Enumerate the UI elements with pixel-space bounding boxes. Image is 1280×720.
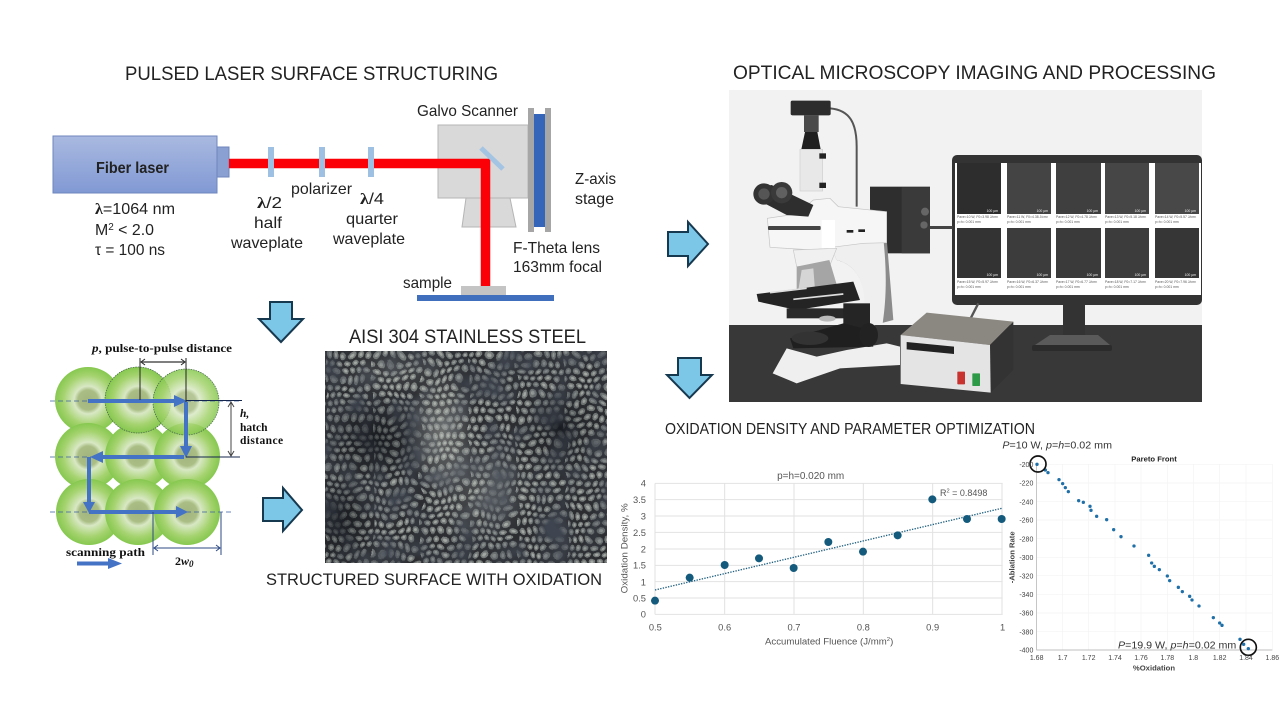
- arrow: scanning direction: [77, 558, 122, 569]
- label: 2w0: 2w: [175, 554, 189, 568]
- micrograph grid: [957, 163, 1199, 278]
- y axis ticks: 1: [641, 577, 646, 587]
- x axis ticks: 1.78: [1161, 655, 1174, 662]
- chart title: Pareto Front: [1131, 454, 1177, 463]
- y axis ticks: -200: [1019, 462, 1033, 469]
- label: sample: sample: [403, 275, 452, 292]
- x axis ticks: 1.8: [1188, 655, 1198, 662]
- x axis title: Accumulated Fluence (J/mm: [765, 636, 879, 646]
- dimension: hatch distance: [186, 400, 242, 457]
- caption: structured surface with oxidation: STRUCTURED SURFACE WITH OXIDATION: [266, 570, 602, 589]
- icon: microscope: [753, 101, 953, 383]
- micrograph captions: p=h= 0.001 mm: [1155, 285, 1179, 289]
- icon: polarizer: [319, 147, 325, 177]
- x axis ticks: 0.7: [788, 623, 800, 633]
- micrograph captions: Pave=15 W, F0=5.97 J/cm²: [957, 280, 999, 284]
- panel: microscope and monitor illustration: [729, 90, 1202, 402]
- dimension: 2w0: [153, 512, 221, 555]
- micrograph scale labels: 100 µm: [1037, 273, 1048, 277]
- label: z-axis stage: [575, 171, 616, 208]
- y axis ticks: 1.5: [633, 561, 646, 571]
- panel: scanning pattern diagram: [50, 343, 283, 569]
- micrograph captions: p=h= 0.001 mm: [1105, 220, 1129, 224]
- y axis ticks: 0.5: [633, 594, 646, 604]
- label: f-theta lens: [513, 240, 602, 276]
- y axis ticks: 3.5: [633, 495, 646, 505]
- x axis ticks: 1.74: [1108, 655, 1122, 662]
- micrograph captions: Pave=17 W, F0=6.77 J/cm²: [1056, 280, 1098, 284]
- micrograph captions: p=h= 0.001 mm: [1155, 220, 1179, 224]
- micrograph scale labels: 100 µm: [1185, 209, 1196, 213]
- micrograph captions: p=h= 0.001 mm: [1056, 220, 1080, 224]
- y axis ticks: -260: [1019, 518, 1033, 525]
- micrograph captions: Pave=11 W, F0=4.38 J/cm²: [1007, 215, 1049, 219]
- x axis ticks: 1.68: [1030, 655, 1044, 662]
- x axis ticks: [649, 623, 1005, 633]
- y axis ticks: 0: [641, 610, 646, 620]
- y axis ticks: -320: [1019, 573, 1033, 580]
- micrograph scale labels: 100 µm: [1185, 273, 1196, 277]
- chart: pareto front: [1002, 441, 1279, 672]
- y axis ticks: -240: [1019, 499, 1033, 506]
- annotation: top point: P=10 W, p=h=0.02 mm: [1002, 441, 1112, 452]
- y axis ticks: 2: [641, 544, 646, 554]
- micrograph captions: Pave=12 W, F0=4.78 J/cm²: [1056, 215, 1098, 219]
- background wall: [729, 90, 1202, 325]
- laser parameters: 2: [108, 222, 114, 233]
- micrograph captions: Pave=16 W, F0=6.37 J/cm²: [1007, 280, 1049, 284]
- micrograph captions: p=h= 0.001 mm: [1105, 285, 1129, 289]
- label: half waveplate: waveplate: [230, 235, 303, 252]
- y axis ticks: 2.5: [633, 528, 646, 538]
- label: quarter waveplate: quarter: [346, 211, 399, 228]
- highlight circle: top: [1030, 456, 1046, 472]
- y axis title: Oxidation Density, %: [619, 503, 629, 593]
- x axis ticks: 1.72: [1082, 655, 1096, 662]
- label: quarter waveplate: λ/4: [360, 191, 384, 208]
- label: scanning path: scanning path: [66, 547, 146, 559]
- y axis title: -Ablation Rate: [1008, 531, 1017, 583]
- label: hatch distance: [240, 408, 283, 447]
- micrograph captions: p=h= 0.001 mm: [957, 285, 981, 289]
- micrograph captions: p=h= 0.001 mm: [1007, 285, 1031, 289]
- arrow: down to optimization: [667, 358, 712, 398]
- label: hatch distance: hatch: [240, 422, 268, 434]
- y axis ticks: -380: [1019, 629, 1033, 636]
- highlight circle: bottom: [1240, 639, 1256, 655]
- heading: oxidation density and parameter optimization: OXIDATION DENSITY AND PARAMETER OPTIMIZATION: [665, 421, 1035, 438]
- row centre lines: [50, 401, 240, 512]
- icon: galvo mirror: [481, 148, 503, 169]
- annotation: bottom point: P=19.9 W, p=h=0.02 mm: [1118, 640, 1236, 651]
- heading: AISI 304 stainless steel: AISI 304 STAINLESS STEEL: [349, 327, 586, 348]
- x axis ticks: 0.6: [718, 623, 731, 633]
- x axis ticks: [1030, 655, 1279, 662]
- micrograph captions: p=h= 0.001 mm: [1056, 285, 1080, 289]
- icon: quarter waveplate: [368, 147, 374, 177]
- data points: [651, 495, 1006, 605]
- bench: [729, 325, 1202, 402]
- laser beam path: [229, 164, 486, 286]
- micrograph scale labels: 100 µm: [1037, 209, 1048, 213]
- trendline: [655, 508, 1002, 590]
- label: half waveplate: λ/2: [257, 195, 282, 212]
- micrograph captions: Pave=13 W, F0=5.18 J/cm²: [1105, 215, 1147, 219]
- y axis ticks: 4: [641, 479, 646, 489]
- x axis title: %Oxidation: [1133, 663, 1175, 672]
- label: hatch distance: h,: [240, 408, 249, 420]
- image: structured steel surface: [325, 351, 607, 563]
- x axis title: 2: [887, 637, 890, 643]
- micrograph captions: Pave=18 W, F0=7.17 J/cm²: [1105, 280, 1147, 284]
- micrograph scale labels: 100 µm: [1135, 209, 1146, 213]
- title: pulsed laser surface structuring: PULSED LASER SURFACE STRUCTURING: [125, 64, 498, 85]
- label: 2w0: 0: [189, 559, 194, 569]
- r-squared label: = 0.8498: [950, 488, 987, 498]
- label: f-theta lens: 163mm focal: [513, 259, 602, 276]
- x axis title: ): [890, 636, 893, 646]
- micrograph captions: Pave=10 W, F0=3.98 J/cm²: [957, 215, 999, 219]
- label: hatch distance: distance: [240, 435, 283, 447]
- title: optical microscopy imaging and processing: OPTICAL MICROSCOPY IMAGING AND PROCESSING: [733, 63, 1216, 84]
- label: z-axis stage: stage: [575, 191, 614, 208]
- y axis ticks: -300: [1019, 555, 1033, 562]
- label: half waveplate: [230, 195, 303, 252]
- arrow: right to microscopy: [668, 222, 708, 266]
- r-squared label: R: [940, 488, 946, 498]
- micrograph scale labels: 100 µm: [987, 273, 998, 277]
- x axis ticks: 1.7: [1058, 655, 1068, 662]
- x axis ticks: 0.8: [857, 623, 870, 633]
- label: pulse distance: p, pulse-to-pulse distance: [91, 343, 232, 355]
- y axis ticks: -340: [1019, 592, 1033, 599]
- micrograph captions: Pave=20 W, F0=7.96 J/cm²: [1155, 280, 1197, 284]
- icon: controller box: [901, 303, 1013, 393]
- icon: monitor: [952, 155, 1202, 305]
- icon: laser output nozzle: [217, 147, 229, 177]
- y axis ticks: -220: [1019, 481, 1033, 488]
- icon: sample and table: [417, 286, 554, 301]
- gridlines: [1037, 464, 1272, 650]
- x axis ticks: 0.9: [926, 623, 939, 633]
- icon: fiber laser body: [53, 136, 217, 193]
- x axis ticks: 1.82: [1213, 655, 1227, 662]
- panel: laser optical setup diagram: [53, 103, 616, 301]
- arrow heads: [83, 395, 192, 518]
- x axis ticks: 1.76: [1134, 655, 1148, 662]
- x axis ticks: 1.84: [1239, 655, 1253, 662]
- label: f-theta lens: F-Theta lens: [513, 240, 600, 257]
- y axis ticks: -280: [1019, 536, 1033, 543]
- gridlines: [655, 483, 1003, 614]
- pareto points: [1035, 463, 1250, 650]
- laser parameters: [95, 201, 175, 259]
- micrograph captions: p=h= 0.001 mm: [1007, 220, 1031, 224]
- label: z-axis stage: Z-axis: [575, 171, 616, 188]
- label: quarter waveplate: waveplate: [332, 231, 405, 248]
- micrograph scale labels: [987, 209, 1196, 277]
- laser parameters: τ = 100 ns: [95, 242, 165, 259]
- laser parameters: < 2.0: [114, 222, 154, 239]
- micrograph scale labels: 100 µm: [1135, 273, 1146, 277]
- micrograph captions: Pave=14 W, F0=5.57 J/cm²: [1155, 215, 1197, 219]
- icon: z-axis stage: [528, 108, 551, 232]
- micrograph scale labels: 100 µm: [1087, 273, 1098, 277]
- x axis ticks: 0.5: [649, 623, 662, 633]
- icon: f-theta lens: [462, 198, 516, 227]
- y axis ticks: [1019, 462, 1033, 655]
- label: quarter waveplate: [332, 191, 405, 248]
- x axis ticks: 1.86: [1266, 655, 1279, 662]
- x axis ticks: 1: [1000, 623, 1005, 633]
- icon: half waveplate: [268, 147, 274, 177]
- micrograph scale labels: 100 µm: [1087, 209, 1098, 213]
- icon: galvo scanner housing: [438, 125, 528, 198]
- r-squared label: 2: [946, 489, 950, 495]
- micrograph scale labels: 100 µm: [987, 209, 998, 213]
- label: half waveplate: half: [254, 215, 283, 232]
- label: galvo scanner: Galvo Scanner: [417, 103, 519, 120]
- chart title: p=h=0.020 mm: [777, 471, 844, 482]
- y axis ticks: -400: [1019, 648, 1033, 655]
- y axis ticks: -360: [1019, 611, 1033, 618]
- y axis ticks: [633, 479, 646, 620]
- micrograph captions: [957, 215, 1197, 289]
- laser spot grid: [55, 367, 220, 545]
- laser parameters: λ=1064 nm: [95, 201, 175, 218]
- arrow: down to scan pattern: [259, 302, 303, 342]
- arrow: right to steel image: [263, 488, 302, 531]
- scan path arrows: [88, 401, 186, 512]
- y axis ticks: 3: [641, 512, 646, 522]
- label: polarizer: polarizer: [291, 181, 353, 198]
- dimension: pulse distance: [140, 358, 186, 402]
- micrograph captions: p=h= 0.001 mm: [957, 220, 981, 224]
- label: fiber laser: Fiber laser: [96, 160, 169, 177]
- icon: monitor stand: [1032, 304, 1112, 351]
- laser parameters: M: [95, 222, 108, 239]
- chart: oxidation density vs accumulated fluence: [619, 471, 1006, 646]
- axes: [1037, 464, 1272, 650]
